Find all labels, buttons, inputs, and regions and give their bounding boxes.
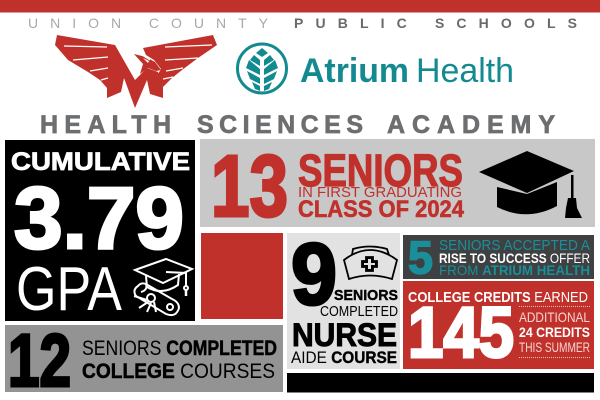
panel: 9 seniors nurse aide: 9	[291, 226, 337, 323]
panel: cumulative GPA	[5, 140, 195, 324]
panel: 145 college credits: 24 CREDITS	[519, 324, 590, 340]
panel: 13 seniors: SENIORS	[298, 145, 463, 196]
icon: graduation cap	[479, 151, 582, 218]
logo: Atrium Health wordmark: Health	[416, 52, 514, 90]
heading: Union County Public Schools	[28, 15, 577, 31]
icon: cap and diploma	[134, 259, 192, 315]
panel: cumulative GPA: GPA	[16, 255, 123, 324]
panel: 5 seniors rise to success: FROM ATRIUM HEALTH	[439, 262, 590, 278]
panel: 145 college credits	[403, 281, 594, 373]
panel: 12 seniors college courses: COLLEGE COURSES	[82, 360, 275, 383]
panel: 13 seniors: CLASS OF 2024	[298, 196, 465, 223]
panel: 145 college credits: COLLEGE CREDITS EARNED	[408, 289, 588, 306]
panel: 9 seniors nurse aide: COMPLETED	[320, 303, 398, 320]
decorative red square panel	[201, 233, 283, 319]
panel: 5 seniors rise to success: SENIORS ACCEPTED A	[439, 237, 590, 254]
panel: 9 seniors nurse aide: AIDE COURSE	[291, 349, 397, 367]
panel: 5 seniors rise to success	[403, 232, 594, 284]
panel: 5 seniors rise to success: 5	[408, 232, 433, 284]
heading: Health Sciences Academy: SCIENCES	[197, 111, 363, 139]
heading: Health Sciences Academy: ACADEMY	[387, 111, 555, 139]
panel: 12 seniors college courses: SENIORS COMPLETED	[82, 337, 277, 360]
logo: Atrium Health wordmark	[300, 52, 514, 90]
logo: Atrium Health wordmark: Atrium	[300, 52, 409, 90]
panel: 9 seniors nurse aide: NURSE	[292, 317, 397, 353]
panel: 13 seniors: IN FIRST GRADUATING	[298, 185, 462, 201]
panel: 9 seniors nurse aide	[287, 226, 400, 369]
heading: Health Sciences Academy: HEALTH	[40, 111, 171, 139]
panel: 5 seniors rise to success: RISE TO SUCCESS OFFER	[439, 250, 590, 266]
heading: Union County Public Schools: PUBLIC SCHOOLS	[294, 15, 577, 31]
panel: cumulative GPA: CUMULATIVE	[11, 148, 190, 176]
panel: 12 seniors college courses: 12	[8, 319, 71, 400]
panel: 145 college credits: 145	[408, 294, 514, 373]
panel: 13 seniors	[200, 138, 595, 235]
top red bar	[0, 0, 600, 12]
black footer bar	[287, 373, 594, 392]
heading: Union County Public Schools: UNION COUNTY	[28, 15, 269, 31]
heading: Health Sciences Academy	[40, 111, 555, 139]
logo: Atrium Health tree mark	[238, 44, 286, 93]
panel: 13 seniors: 13	[211, 138, 288, 235]
panel: cumulative GPA: 3.79	[14, 170, 184, 267]
panel: 12 seniors college courses	[5, 319, 283, 400]
icon: nurse cap	[344, 246, 397, 279]
logo: red eagle M	[55, 35, 217, 108]
panel: 9 seniors nurse aide: SENIORS	[334, 287, 398, 304]
